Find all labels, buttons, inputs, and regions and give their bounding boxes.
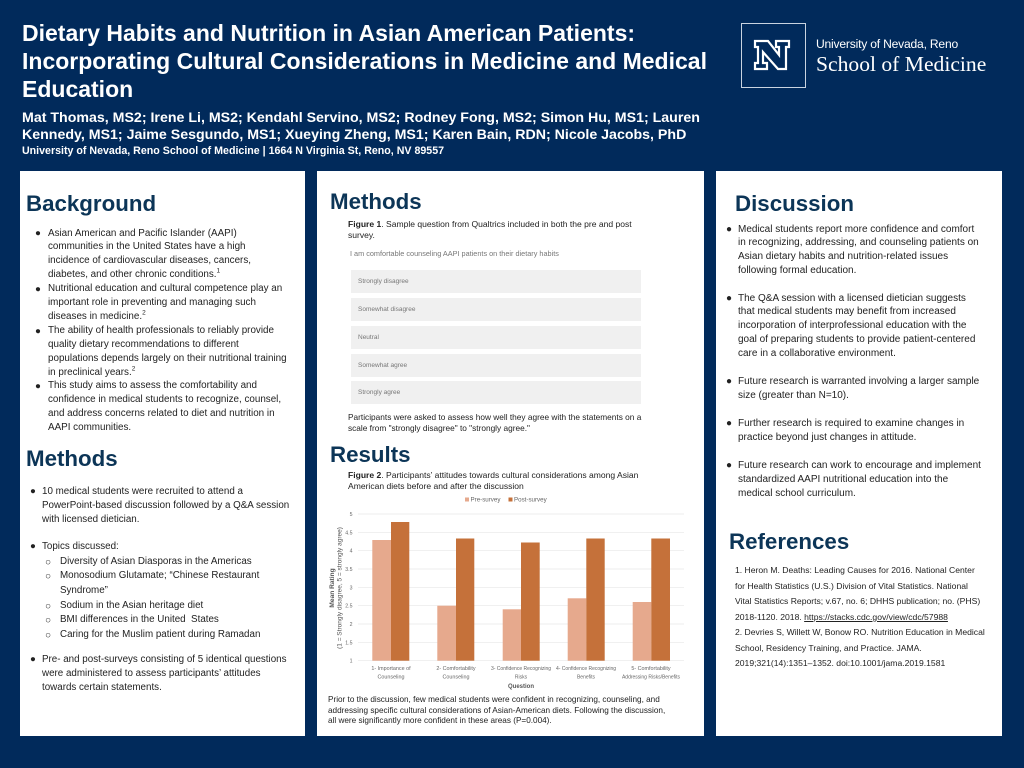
figure 1: response options: Somewhat disagree bbox=[358, 306, 415, 313]
figure 1: response options: Strongly agree bbox=[358, 389, 400, 396]
y axis labels: 4.5 bbox=[345, 530, 353, 536]
x axis labels: 5- Comfortability bbox=[631, 666, 671, 672]
text block: background bullets: Asian American and Pacific Islander (AAPI) bbox=[48, 228, 237, 238]
figure 2 note bbox=[328, 695, 665, 725]
affiliation: University of Nevada, Reno School of Medicine | 1664 N Virginia St, Reno, NV 89557 bbox=[22, 144, 444, 156]
y axis labels: 3 bbox=[350, 585, 353, 591]
sub-bullets: topics bbox=[45, 556, 260, 641]
text block: background bullets: diabetes, and other chronic conditions.1 bbox=[48, 268, 220, 280]
logo text: school: School of Medicine bbox=[816, 52, 986, 76]
figure 1 caption: Figure 1. Sample question from Qualtrics included in both the pre and post bbox=[348, 218, 632, 228]
text block: discussion bullets: ● bbox=[726, 292, 732, 304]
text block: methods bullets: ○ bbox=[45, 601, 51, 612]
y axis labels: 4 bbox=[350, 549, 353, 555]
y axis labels: 3.5 bbox=[345, 567, 353, 573]
text: ● bbox=[35, 381, 41, 392]
panel: right column bbox=[716, 171, 1002, 736]
text block: background bullets: communities in the United States have a high bbox=[48, 241, 246, 252]
bullet: practice: practice beyond just changes in attitude. bbox=[738, 432, 916, 443]
text block: references bbox=[735, 565, 985, 668]
bullet: confidence: Medical students report more confidence and comfort bbox=[738, 224, 974, 234]
x axis labels: Addressing Risks/Benefits bbox=[622, 674, 681, 680]
panel: left column bbox=[20, 171, 305, 736]
y axis labels: 5 bbox=[350, 512, 353, 518]
text block: background bullets: in preclinical years.2 bbox=[48, 365, 135, 378]
x axis labels: 1- Importance of bbox=[371, 666, 411, 672]
figure 2 note: addressing specific cultural considerations of Asian-American diets. Following the discussion, bbox=[328, 706, 665, 714]
bullet: confidence: Asian dietary habits and nutrition-related issues bbox=[738, 251, 948, 262]
title: Education bbox=[22, 76, 133, 102]
bars: pre-survey bbox=[372, 540, 651, 661]
figure 1: response options: Somewhat agree bbox=[358, 362, 407, 369]
bullet: Q&A: that medical students may benefit from increased bbox=[738, 306, 956, 317]
figure 1 note: Participants were asked to assess how well they agree with the statements on a bbox=[348, 412, 641, 422]
y axis labels: 2.5 bbox=[345, 604, 353, 610]
text block: references: 2. Devries S, Willett W, Bonow RO. Nutrition Education in Medical bbox=[735, 627, 985, 637]
icon: block N bbox=[741, 23, 806, 88]
x axis labels: Risks bbox=[515, 674, 528, 680]
text block: background bullets: Nutritional education and cultural competence play an bbox=[48, 283, 282, 294]
sub-bullets: topics: BMI differences in the United States bbox=[60, 614, 219, 625]
bullet: curriculum: medical school curriculum. bbox=[738, 488, 856, 499]
text block: background bullets: This study aims to assess the comfortability and bbox=[48, 380, 257, 391]
panel: middle column bbox=[317, 171, 704, 736]
text block: methods bullets: ○ bbox=[45, 615, 51, 626]
text block: background bullets: and address concerns related to diet and nutrition in bbox=[48, 408, 275, 419]
bullet: surveys bbox=[30, 654, 287, 692]
text block: methods bullets: ● bbox=[30, 654, 36, 664]
bullet: recruitment bbox=[30, 486, 289, 524]
logo text: university: University of Nevada, Reno bbox=[816, 37, 958, 51]
bullet: confidence: in recognizing, addressing, and counseling patients on bbox=[738, 237, 979, 248]
bullet: Q&A: incorporation of interprofessional education with the bbox=[738, 320, 966, 331]
text block: discussion bullets bbox=[726, 224, 981, 499]
heading: methods middle: Methods bbox=[330, 189, 422, 214]
bullet: surveys: were administered to assess participants’ attitudes bbox=[42, 668, 261, 678]
text block: discussion bullets: ● bbox=[726, 418, 732, 429]
sub-bullets: topics: Diversity of Asian Diasporas in the Americas bbox=[60, 556, 252, 566]
authors bbox=[22, 110, 700, 143]
authors: Mat Thomas, MS2; Irene Li, MS2; Kendahl Servino, MS2; Rodney Fong, MS2; Simon Hu, MS1; Lauren bbox=[22, 110, 700, 126]
text block: references: 2018-1120. 2018. https://stacks.cdc.gov/view/cdc/57988 bbox=[735, 612, 948, 622]
y axis labels: 1.5 bbox=[345, 640, 353, 646]
legend bbox=[465, 496, 548, 504]
authors: Kennedy, MS1; Jaime Sesgundo, MS1; Xueying Zheng, MS1; Karen Bain, RDN; Nicole Jacobs, PhD bbox=[22, 127, 686, 143]
text block: methods bullets: ○ bbox=[45, 571, 51, 582]
logo: University of Nevada, Reno School of Medicine bbox=[741, 23, 986, 88]
text block: background bullets bbox=[35, 228, 287, 433]
bullet: curriculum bbox=[726, 460, 981, 499]
text block: methods bullets: ● bbox=[30, 540, 36, 552]
figure 1 note bbox=[348, 412, 642, 432]
figure 2 caption bbox=[348, 470, 638, 490]
bullet: Q&A: The Q&A session with a licensed dietician suggests bbox=[738, 292, 966, 304]
figure 1: response options bbox=[351, 270, 641, 404]
y axis labels bbox=[345, 512, 353, 665]
sub-bullets: topics: Sodium in the Asian heritage diet bbox=[60, 600, 203, 611]
bullet: topics: Topics discussed: bbox=[42, 540, 119, 552]
bullet: confidence bbox=[726, 224, 979, 276]
bullet: recruitment: PowerPoint-based discussion followed by a Q&A session bbox=[42, 500, 289, 510]
bullet: sample size bbox=[726, 376, 979, 401]
text block: references: for Health Statistics (U.S.) Division of Vital Statistics. National bbox=[735, 581, 968, 591]
text: ● bbox=[35, 284, 41, 295]
text block: background bullets: confidence in medical students to recognize, counsel, bbox=[48, 394, 281, 405]
sub-bullets: topics: Syndrome” bbox=[60, 585, 108, 596]
text block: background bullets: AAPI communities. bbox=[48, 422, 131, 433]
text block: background bullets: diseases in medicine.2 bbox=[48, 310, 146, 322]
text block: background bullets: quality dietary recommendations to different bbox=[48, 339, 239, 350]
y axis title: (1 = Strongly disagree, 5 = strongly agree) bbox=[336, 527, 344, 649]
x axis labels: Benefits bbox=[577, 674, 596, 680]
legend: Pre-survey bbox=[470, 496, 501, 504]
text block: discussion bullets: ● bbox=[726, 460, 732, 471]
bullet: recruitment: 10 medical students were recruited to attend a bbox=[42, 486, 243, 496]
title: Dietary Habits and Nutrition in Asian American Patients: bbox=[22, 20, 635, 46]
text block: methods bullets: ○ bbox=[45, 556, 51, 568]
figure 2 caption: Figure 2. Participants’ attitudes towards cultural considerations among Asian bbox=[348, 470, 638, 480]
x axis title: Question bbox=[508, 684, 534, 690]
figure 1 note: scale from "strongly disagree" to "strongly agree." bbox=[348, 422, 530, 432]
bullet: sample size: size (greater than N=10). bbox=[738, 390, 849, 401]
text block: background bullets: important role in preventing and managing such bbox=[48, 297, 256, 308]
text block: discussion bullets: ● bbox=[726, 224, 732, 234]
figure 1: response options: Strongly disagree bbox=[358, 278, 409, 285]
heading: references: References bbox=[729, 529, 849, 554]
y axis labels: 1 bbox=[350, 659, 353, 665]
bullet: surveys: Pre- and post-surveys consisting of 5 identical questions bbox=[42, 654, 287, 664]
heading: discussion: Discussion bbox=[735, 191, 854, 216]
text block: references: 1. Heron M. Deaths: Leading Causes for 2016. National Center bbox=[735, 565, 975, 575]
text: ● bbox=[35, 228, 41, 238]
text block: references: 2019;321(14):1351–1352. doi:10.1001/jama.2019.1581 bbox=[735, 658, 945, 668]
text block: references: School, Residency Training, and Practice. JAMA. bbox=[735, 643, 922, 653]
text block: references: Vital Statistics Reports; v.67, no. 6; DHHS publication; no. (PHS) bbox=[735, 596, 980, 606]
text block: background bullets: populations depends largely on their nutritional training bbox=[48, 353, 287, 364]
x axis labels bbox=[371, 666, 681, 680]
x axis labels: Counseling bbox=[443, 674, 469, 680]
bullet: curriculum: standardized AAPI nutritional education into the bbox=[738, 474, 948, 485]
figure 1 caption: survey. bbox=[348, 230, 375, 240]
x axis labels: 3- Confidence Recognizing bbox=[491, 666, 551, 672]
x axis labels: Counseling bbox=[378, 674, 404, 680]
x axis labels: 4- Confidence Recognizing bbox=[556, 666, 616, 672]
bullet: practice bbox=[726, 418, 964, 443]
text block: background bullets: incidence of cardiovascular diseases, cancers, bbox=[48, 255, 251, 266]
figure 2 note: all were significantly more confident in these areas (P=0.004). bbox=[328, 716, 552, 725]
bar chart bbox=[329, 496, 684, 690]
sub-bullets: topics: Monosodium Glutamate; “Chinese Restaurant bbox=[60, 570, 259, 581]
title: Incorporating Cultural Considerations in Medicine and Medical bbox=[22, 48, 707, 74]
y axis labels: 2 bbox=[350, 622, 353, 628]
text block: discussion bullets: ● bbox=[726, 376, 732, 387]
bullet: Q&A: goal of preparing students to provide patient-centered bbox=[738, 334, 975, 345]
bullet: practice: Further research is required to examine changes in bbox=[738, 418, 964, 429]
text block: methods bullets: ○ bbox=[45, 630, 51, 641]
figure 1: response options: Neutral bbox=[358, 334, 379, 341]
bullet: surveys: towards certain statements. bbox=[42, 682, 162, 692]
sub-bullets: topics: Caring for the Muslim patient during Ramadan bbox=[60, 629, 260, 640]
heading: results: Results bbox=[330, 442, 411, 467]
text block: methods bullets bbox=[30, 486, 289, 692]
bullet: confidence: following formal education. bbox=[738, 265, 856, 276]
bullet: Q&A bbox=[726, 292, 975, 359]
title bbox=[22, 20, 707, 102]
figure 1: survey question: I am comfortable counseling AAPI patients on their dietary habits bbox=[350, 249, 559, 258]
text block: background bullets: The ability of health professionals to reliably provide bbox=[48, 325, 274, 336]
text block: methods bullets: ● bbox=[30, 486, 36, 496]
bullet: recruitment: with licensed dietician. bbox=[42, 514, 139, 524]
heading: methods left: Methods bbox=[26, 446, 118, 471]
figure 1 caption bbox=[348, 218, 632, 240]
legend: Post-survey bbox=[514, 496, 548, 504]
bullet: sample size: Future research is warranted involving a larger sample bbox=[738, 376, 979, 387]
bars: post-survey bbox=[391, 522, 670, 661]
heading: background: Background bbox=[26, 191, 156, 216]
text: ● bbox=[35, 326, 41, 337]
x axis labels: 2- Comfortability bbox=[436, 666, 476, 672]
figure 2 note: Prior to the discussion, few medical students were confident in recognizing, counseling, and bbox=[328, 695, 660, 704]
bullet: curriculum: Future research can work to encourage and implement bbox=[738, 460, 981, 471]
figure 2 caption: American diets before and after the discussion bbox=[348, 480, 524, 490]
bullet: Q&A: care in a collaborative environment. bbox=[738, 348, 896, 359]
y axis title: Mean Rating bbox=[329, 568, 336, 608]
